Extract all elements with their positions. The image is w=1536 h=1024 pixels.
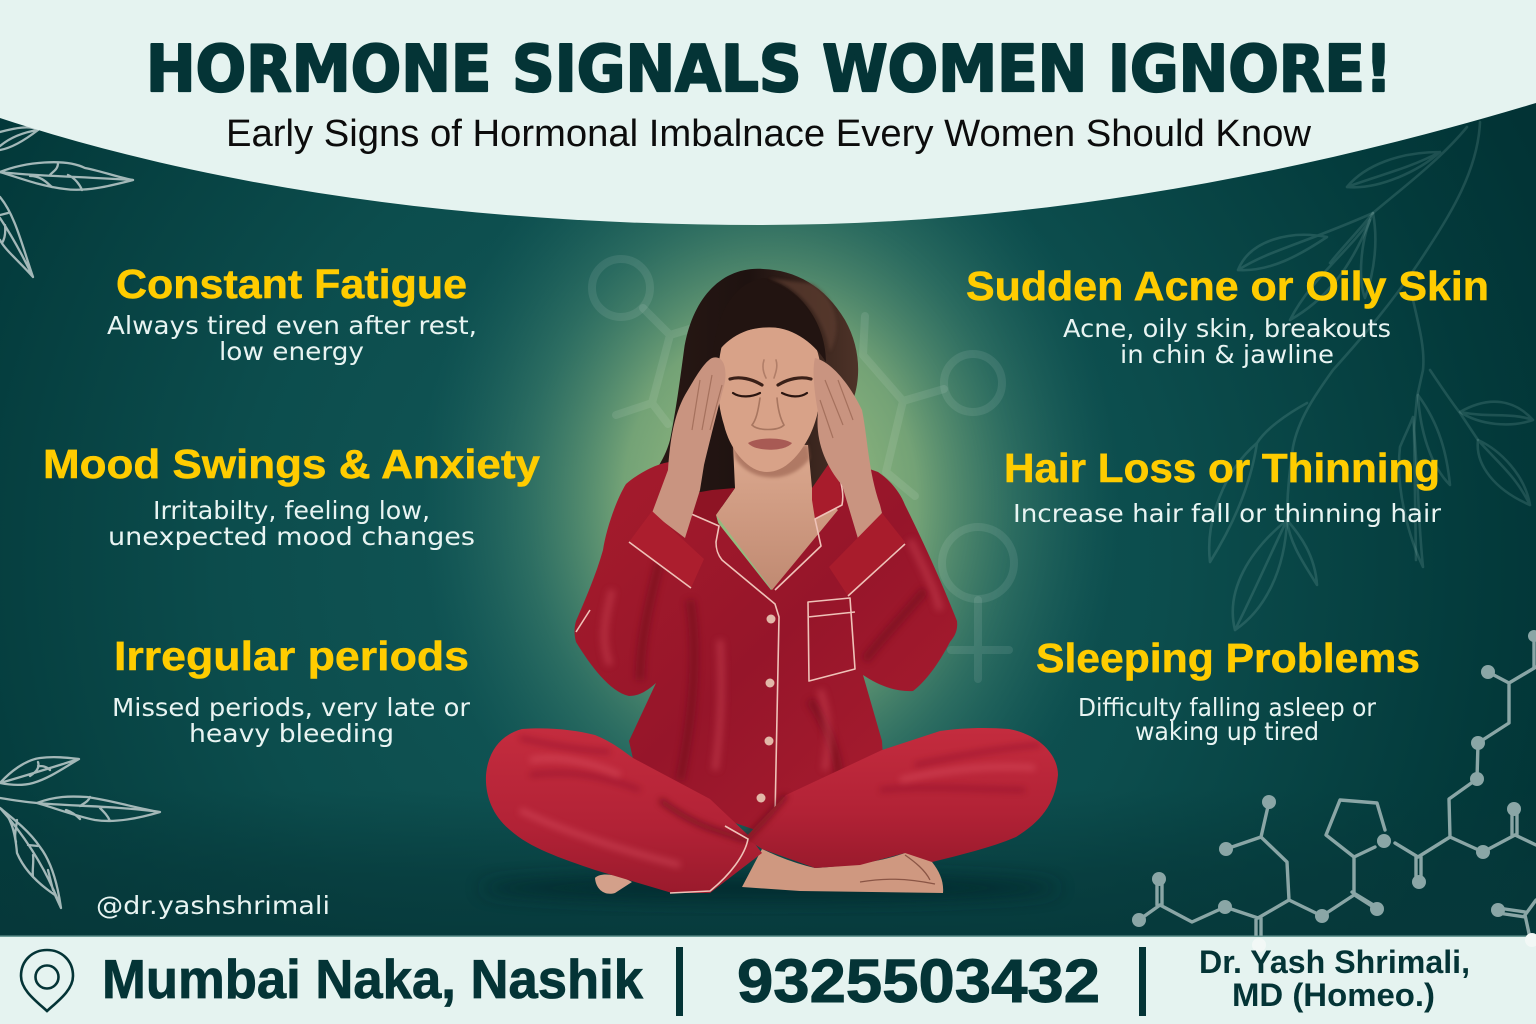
shirt buttons	[756, 614, 776, 802]
panel: Constant Fatigue	[107, 261, 477, 366]
description: Acne	[1063, 314, 1391, 369]
heading: Sleeping Problems: Sleeping Problems	[1036, 635, 1420, 681]
shirt piping	[576, 472, 855, 816]
left foot	[595, 875, 632, 894]
right trouser leg	[745, 728, 1058, 868]
collar right	[812, 462, 842, 519]
description: Acne: in chin & jawline	[1120, 340, 1334, 369]
panel: Hair Loss	[1004, 445, 1442, 528]
panel: Mood Swings	[43, 441, 540, 551]
left cuff	[629, 511, 704, 588]
hair over forehead	[712, 278, 826, 362]
location text: Mumbai Naka, Nashik	[102, 948, 643, 1010]
social handle: @dr.yashshrimali	[96, 891, 330, 920]
center glow	[420, 80, 1120, 920]
right hand and forearm	[814, 358, 882, 542]
description: Mood Swings: unexpected mood changes	[108, 522, 475, 551]
doctor name: Dr. Yash Shrimali,	[1199, 944, 1470, 980]
doctor name: MD (Homeo.)	[1232, 977, 1435, 1013]
phone number: 9325503432	[737, 947, 1100, 1015]
description: Sleeping Problems	[1078, 693, 1377, 746]
shirt	[574, 462, 957, 835]
floor shading	[0, 790, 1536, 940]
header curved panel	[0, 0, 1536, 225]
doctor name	[1199, 944, 1470, 1013]
description: Irregular periods: heavy bleeding	[189, 719, 394, 748]
left trouser leg	[486, 728, 762, 893]
description: Constant Fatigue: Always tired even after rest,	[107, 311, 477, 340]
description: Mood Swings: Irritabilty, feeling low,	[153, 496, 430, 525]
panel: Acne	[966, 263, 1489, 369]
description: Sleeping Problems: Difficulty falling asleep or	[1078, 693, 1377, 722]
hair	[640, 269, 858, 510]
face	[718, 327, 821, 472]
heading: Irregular periods: Irregular periods	[114, 633, 469, 679]
subtitle: Early Signs of Hormonal Imbalnace Every Women Should Know	[226, 113, 1312, 155]
facial features: brows, eyes, nose, mouth	[730, 360, 811, 430]
heading: Acne: Sudden Acne or Oily Skin	[966, 263, 1489, 309]
leaf cluster bottom left	[0, 757, 160, 908]
right foot	[742, 849, 943, 893]
panel: Sleeping Problems	[1036, 635, 1420, 746]
separator	[676, 947, 683, 1016]
heading: Constant Fatigue: Constant Fatigue	[116, 261, 467, 307]
illustration: woman with headache sitting cross-legged	[480, 269, 1060, 902]
lips	[748, 438, 792, 450]
neck and chest	[716, 445, 838, 590]
description: Mood Swings	[108, 496, 475, 551]
description: Irregular periods	[112, 693, 471, 748]
right cuff	[829, 513, 905, 596]
description: Constant Fatigue: low energy	[219, 337, 364, 366]
description: Hair Loss: Increase hair fall or thinning hair	[1013, 499, 1442, 528]
heading: Hair Loss: Hair Loss or Thinning	[1004, 445, 1440, 491]
icon: location pin	[21, 950, 73, 1011]
faint molecule and female symbols	[592, 259, 1014, 679]
heading: Mood Swings: Mood Swings & Anxiety	[43, 441, 540, 487]
collar left	[689, 488, 735, 526]
description: Irregular periods: Missed periods, very late or	[112, 693, 471, 722]
left hand and forearm	[652, 357, 726, 538]
description: Sleeping Problems: waking up tired	[1135, 717, 1319, 746]
separator	[1139, 947, 1146, 1016]
trouser cuff piping	[670, 826, 748, 893]
description: Acne: Acne, oily skin, breakouts	[1063, 314, 1391, 343]
molecule chain bottom right	[1132, 630, 1536, 945]
description: Constant Fatigue	[107, 311, 477, 366]
faded molecule ends over footer	[1252, 933, 1536, 952]
leaf cluster top left	[0, 127, 133, 277]
faint leaves upper right	[1209, 122, 1533, 630]
panel: Irregular periods	[112, 633, 471, 748]
main title: HORMONE SIGNALS WOMEN IGNORE!	[146, 33, 1392, 107]
footer bar	[0, 933, 1536, 1024]
